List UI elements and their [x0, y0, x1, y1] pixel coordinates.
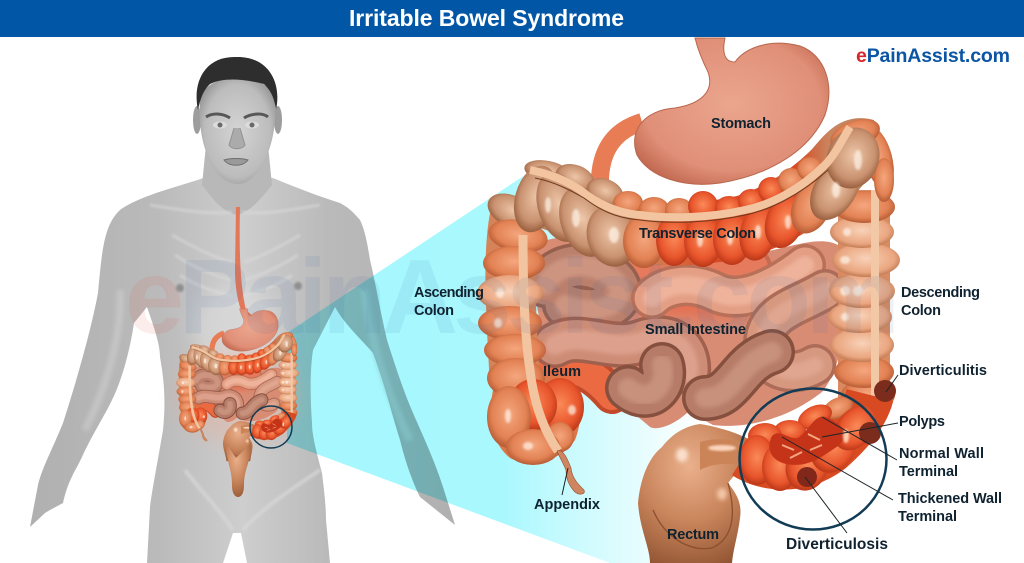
human body figure: [30, 57, 455, 563]
label: Rectum: Rectum: [667, 527, 719, 543]
label: Descending Colon: [901, 285, 980, 319]
dark spots: [797, 380, 896, 487]
hair: [197, 57, 277, 110]
label: Stomach: Stomach: [711, 116, 771, 132]
label: Polyps: Polyps: [899, 414, 945, 430]
label: Thickened Wall Terminal: Thickened Wall: [898, 491, 1002, 507]
miniature organs: [176, 309, 299, 461]
torso and arms: [30, 178, 455, 563]
logo: ePainAssist.com: ePainAssist.com: [856, 45, 1010, 67]
label: Normal Wall Terminal: [899, 446, 984, 480]
label: Diverticulitis: Diverticulitis: [899, 363, 987, 379]
eyes and brows: [206, 114, 268, 128]
label: Small Intestine: Small Intestine: [645, 322, 746, 338]
label: Descending Colon: Colon: [901, 303, 941, 319]
esophagus: [235, 207, 255, 324]
label: Normal Wall Terminal: Terminal: [899, 464, 958, 480]
miniature rectum tail: [226, 443, 251, 497]
label: Thickened Wall Terminal: Terminal: [898, 509, 957, 525]
title banner: [0, 0, 1024, 37]
label: Appendix: Appendix: [534, 497, 600, 513]
title: Irritable Bowel Syndrome: [349, 5, 624, 31]
mouth: [224, 158, 248, 165]
leader lines: [562, 375, 898, 533]
face: [200, 78, 275, 184]
label: Ascending Colon: Ascending: [414, 285, 484, 301]
large organs: [477, 38, 900, 563]
miniature glow: [176, 347, 300, 443]
miniature callout circle: [250, 406, 292, 448]
label: Transverse Colon: Transverse Colon: [639, 226, 756, 242]
cyan zoom wedge: [287, 175, 740, 563]
label: Descending Colon: Descending: [901, 285, 980, 301]
label: Normal Wall Terminal: Normal Wall: [899, 446, 984, 462]
label: Diverticulosis: Diverticulosis: [786, 536, 888, 553]
neck: [202, 145, 272, 215]
label: Ileum: Ileum: [543, 364, 581, 380]
label: Ascending Colon: Colon: [414, 303, 454, 319]
magnifier circle: [740, 388, 886, 530]
watermark: ePainAssist.com: [125, 238, 900, 356]
label: Ascending Colon: [414, 285, 484, 319]
chest highlights: [150, 205, 320, 296]
nose: [229, 128, 245, 149]
ears: [193, 106, 201, 134]
label: Thickened Wall Terminal: [898, 491, 1002, 525]
